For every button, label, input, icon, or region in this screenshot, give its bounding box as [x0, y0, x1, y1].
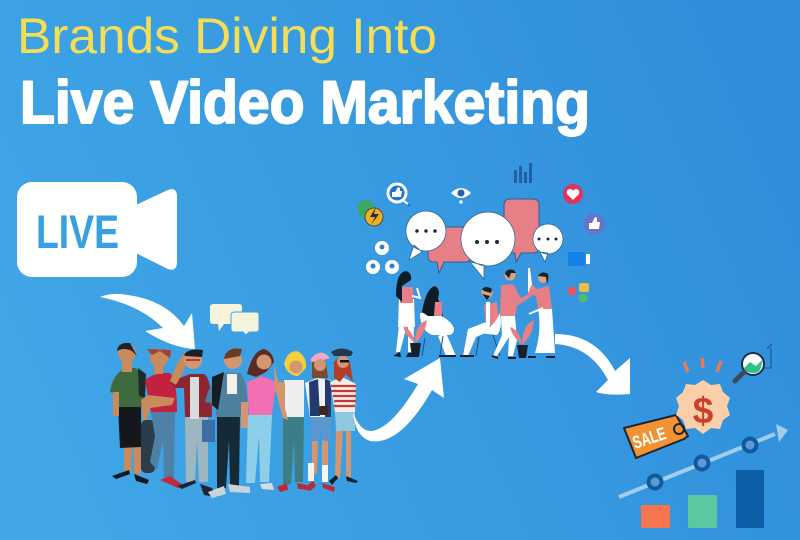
person 8: red hair and striped shirt [329, 348, 358, 485]
person: standing woman with tablet [393, 271, 420, 357]
person 7: pink cap and navy vest [303, 352, 335, 492]
person 5: pink shirt [246, 349, 281, 490]
person: woman in long skirt [528, 268, 555, 357]
icon: live video camera: LIVE [36, 205, 119, 258]
person 3: plaid shirt [170, 350, 217, 497]
icon: heart [563, 184, 583, 204]
arrow: conversation to sales [555, 334, 630, 395]
person 4: blue jacket [205, 348, 250, 498]
person 2: red shirt and skateboard [141, 349, 183, 488]
icon: sale price tag [624, 415, 688, 458]
icon: dollar badge: $ [693, 390, 714, 431]
title: Live Video Marketing: Live Video Marketing [20, 69, 590, 136]
speech bubble: white centre [461, 212, 515, 279]
chart: three growth bars [641, 470, 764, 528]
icon: audience speech bubbles [210, 304, 259, 335]
icon: thumbs up [584, 214, 604, 234]
icon: analytics magnifier [735, 344, 772, 381]
icon: orange rays [684, 358, 721, 372]
icon: user network [366, 241, 399, 274]
arrow: audience to conversation [353, 358, 444, 441]
icon: lightning chat badges [357, 200, 383, 226]
icon: bar chart [514, 163, 532, 183]
speech bubble: pink left [428, 227, 471, 273]
icon: live video camera [17, 182, 176, 277]
speech bubble: pink right [504, 199, 539, 262]
title: Brands Diving Into: Brands Diving Into [17, 8, 437, 64]
person 6: blonde in white tank [277, 351, 311, 492]
illustration: social media conversation [357, 163, 604, 358]
icon: colour chat cluster [568, 283, 589, 302]
icon: video chip [568, 252, 590, 266]
person: seated bearded man [460, 287, 501, 356]
icon: thumbs-up magnifier [388, 184, 410, 206]
icon: dollar badge [676, 380, 730, 434]
illustration: group of eight young people [110, 343, 358, 498]
icon: sale price tag: SALE [630, 423, 669, 453]
person 1: green shirt [110, 343, 149, 484]
arrow: camera to audience [100, 294, 195, 349]
plant: right [510, 320, 534, 358]
icon: eye [451, 188, 471, 204]
plant: left [404, 320, 427, 357]
speech bubble: white right [533, 224, 563, 262]
speech bubble: white left [406, 211, 446, 260]
person: seated woman [420, 286, 456, 356]
person: man high-five [492, 270, 532, 358]
chart: trend line with markers [619, 424, 788, 497]
